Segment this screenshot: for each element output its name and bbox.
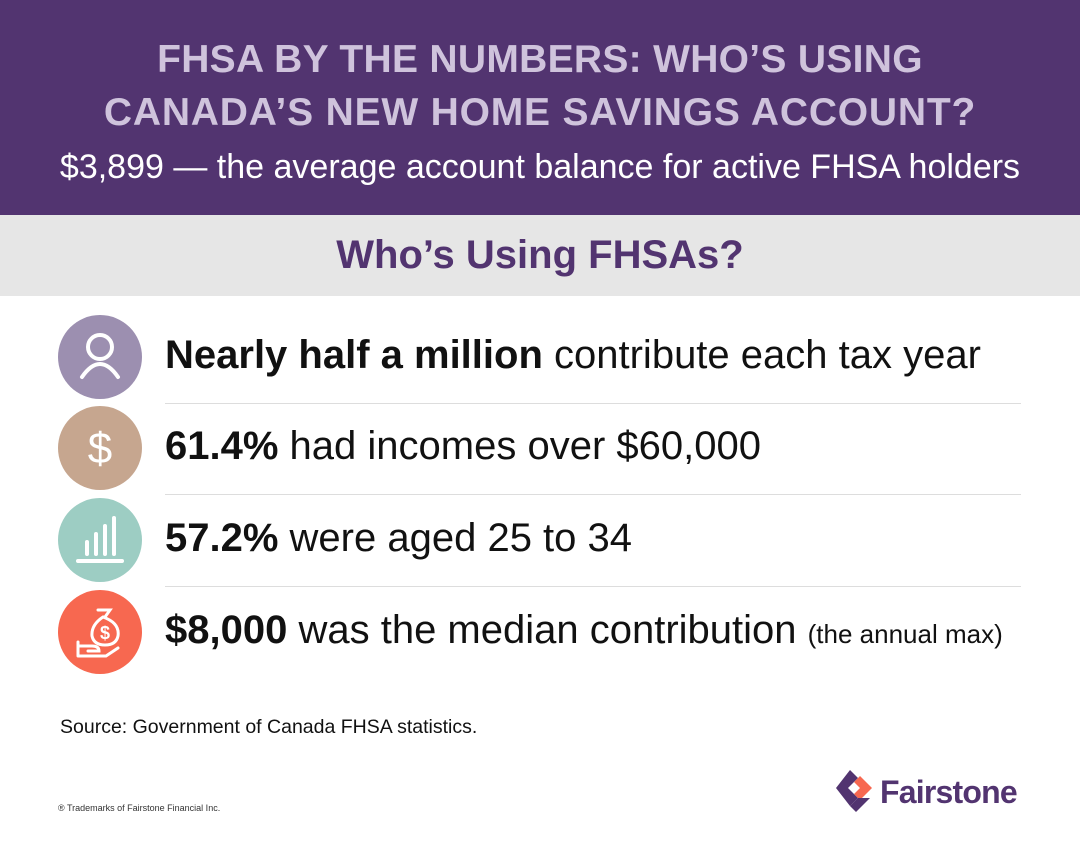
icon: money bag in hand [58, 590, 142, 674]
title line 2: CANADA’S NEW HOME SAVINGS ACCOUNT? [104, 91, 976, 134]
row 2 text: 61.4% had incomes over $60,000 [165, 424, 761, 468]
header [0, 0, 1080, 215]
section heading band: Who’s Using FHSAs? [336, 233, 744, 277]
row 4 text: $8,000 was the median contribution (the annual max) [165, 608, 1003, 652]
icon: money bag in hand: $ [100, 623, 110, 643]
logo: Fairstone [880, 774, 1017, 810]
row 1 text: Nearly half a million contribute each tax year [165, 333, 981, 377]
logo [836, 770, 1017, 812]
title line 1: FHSA BY THE NUMBERS: WHO’S USING [157, 38, 923, 81]
row 3 text: 57.2% were aged 25 to 34 [165, 516, 632, 560]
section heading band [0, 215, 1080, 296]
icon: dollar [58, 406, 142, 490]
trademark footnote: ® Trademarks of Fairstone Financial Inc. [58, 803, 220, 813]
icon: person [58, 315, 142, 399]
icon: bar chart [58, 498, 142, 582]
icon: dollar: $ [88, 424, 112, 473]
source: Source: Government of Canada FHSA statistics. [60, 716, 477, 738]
subtitle: $3,899 — the average account balance for active FHSA holders [60, 148, 1020, 186]
